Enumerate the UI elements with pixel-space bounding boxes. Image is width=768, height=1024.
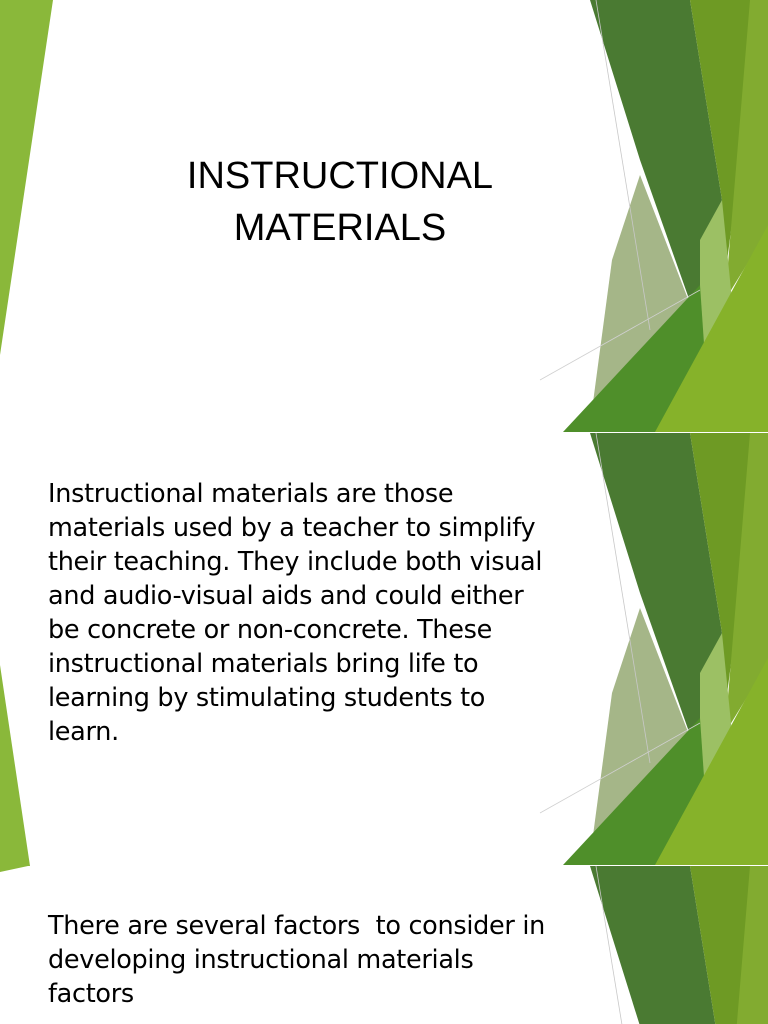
body text [48,479,542,747]
decoration: green shapes [0,433,768,866]
decoration: green shapes [0,866,768,1024]
factors text: factors [48,979,134,1009]
slide 3: factors [0,866,768,1024]
slide 1: title slide [0,0,768,433]
title: MATERIALS [234,207,446,249]
title [187,155,493,249]
body text: their teaching. They include both visual [48,547,542,577]
body text: and audio-visual aids and could either [48,581,523,611]
factors text: developing instructional materials [48,945,473,975]
factors text: There are several factors to consider in [48,911,545,941]
body text: materials used by a teacher to simplify [48,513,535,543]
body text: be concrete or non-concrete. These [48,615,492,645]
body text: Instructional materials are those [48,479,453,509]
decoration: green shapes [0,0,768,432]
body text: learning by stimulating students to [48,683,485,713]
slide 2: definition [0,433,768,866]
body text: instructional materials bring life to [48,649,478,679]
factors text [48,911,545,1009]
body text: learn. [48,717,119,747]
title: INSTRUCTIONAL [187,155,493,197]
